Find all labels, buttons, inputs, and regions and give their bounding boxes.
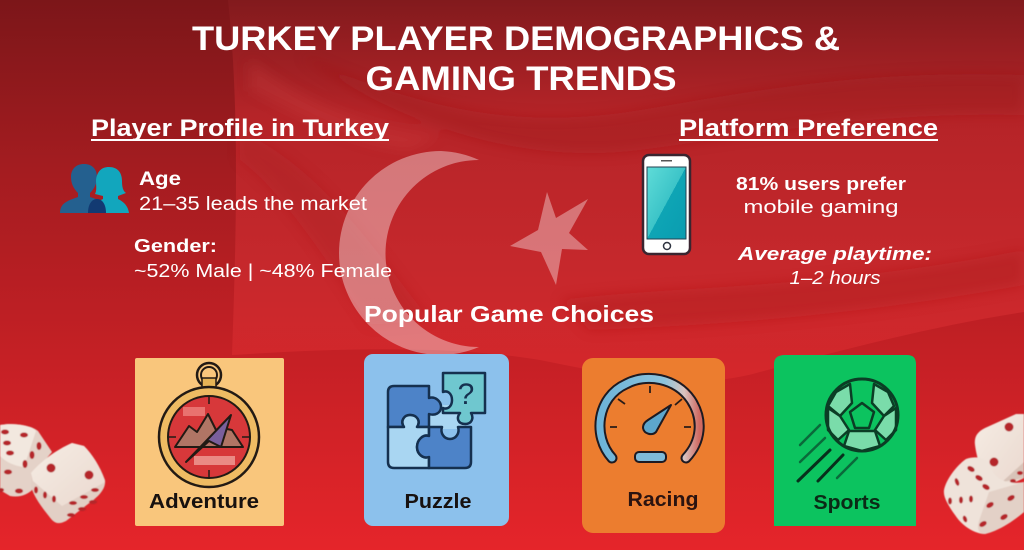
card: sports [774,355,916,526]
icon: puzzle: ? [458,378,474,411]
label: sports: Sports [814,492,880,514]
text: gender [134,235,392,281]
heading: popular game choices: Popular Game Choices [364,301,654,327]
card: puzzle [364,354,509,526]
panel: platform preference [643,115,938,288]
icon: speedometer [600,378,699,462]
text: playtime: Average playtime: [737,243,932,264]
icon: people [60,164,129,213]
text: gender: ~52% Male | ~48% Female [134,260,392,281]
text: mobile share: mobile gaming [744,196,898,217]
heading: platform preference: Platform Preference [679,115,938,142]
text: age: 21–35 leads the market [139,193,368,215]
icon: soccer ball [798,379,898,481]
card: racing [582,358,725,533]
icon: dice left [0,424,105,523]
title [192,20,840,98]
card: adventure [135,358,284,526]
label: adventure: Adventure [149,491,259,513]
text: playtime: 1–2 hours [790,267,880,288]
text: gender: Gender: [134,235,217,256]
text: age: Age [139,168,181,190]
label: racing: Racing [628,489,698,511]
flag backdrop [228,0,1024,381]
icon: smartphone [643,155,690,254]
text: mobile share: 81% users prefer [736,173,906,194]
heading: player profile: Player Profile in Turkey [91,115,390,142]
label: puzzle: Puzzle [404,491,472,513]
panel: player profile [60,115,392,281]
icon: dice right [944,414,1024,534]
icon: compass [159,363,259,487]
text: playtime [737,243,932,288]
crescent [339,151,479,355]
title: TURKEY PLAYER DEMOGRAPHICS & [192,20,840,58]
star [510,192,588,285]
text: mobile share [736,173,906,217]
title: GAMING TRENDS [366,60,676,98]
text: age [139,168,368,215]
icon: puzzle [388,373,485,468]
